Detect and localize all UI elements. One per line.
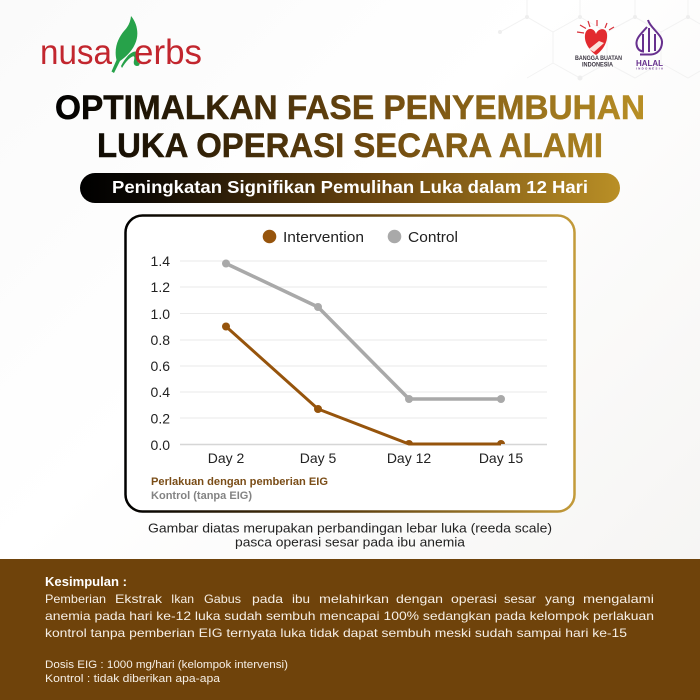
dosage notes: [45, 659, 288, 685]
icon: gunungan: [636, 20, 662, 54]
caption: Gambar diatas merupakan perbandingan lebar luka (reeda scale): [148, 520, 552, 536]
title: OPTIMALKAN FASE PENYEMBUHAN: [55, 89, 645, 127]
subtitle pill: [80, 173, 620, 203]
chart legend: Control: [408, 230, 458, 246]
y axis labels: 1.4: [151, 253, 170, 269]
panel: conclusion: [0, 559, 700, 700]
conclusion body: sesar: [504, 592, 536, 606]
caption: [148, 520, 552, 550]
logo: nusaherbs: [40, 16, 202, 73]
y axis labels: 1.0: [151, 306, 170, 322]
logo: Bangga Buatan Indonesia: BANGGA BUATAN: [575, 55, 622, 62]
chart legend: [263, 230, 458, 246]
x axis labels: [208, 450, 523, 466]
y axis labels: [151, 253, 170, 453]
y axis labels: 0.0: [151, 437, 170, 453]
icon: red heart: [585, 29, 607, 55]
y axis labels: 0.6: [151, 358, 170, 374]
conclusion body: dengan: [396, 592, 443, 606]
y axis labels: 0.4: [151, 384, 170, 400]
conclusion body: anemia pada hari ke-12 luka sudah sembuh mencapai 100% sedangkan pada kelompok perlakuan: [45, 609, 654, 623]
subtitle pill: Peningkatan Signifikan Pemulihan Luka dalam 12 Hari: [112, 177, 588, 197]
y axis labels: 1.2: [151, 279, 170, 295]
series: control: [222, 260, 505, 403]
y axis labels: 0.2: [151, 410, 170, 426]
caption: pasca operasi sesar pada ibu anemia: [235, 534, 466, 550]
conclusion body: ibu: [292, 592, 310, 606]
conclusion body: kontrol tanpa pemberian EIG ternyata luka tidak dapat sembuh meski sudah sampai hari ke-15: [45, 626, 627, 640]
panel: chart card: [126, 216, 574, 512]
conclusion body: [45, 592, 654, 640]
logo: Halal Indonesia: INDONESIA: [636, 66, 663, 70]
x axis labels: Day 5: [300, 450, 336, 466]
conclusion body: Gabus: [204, 592, 241, 606]
conclusion body: operasi: [451, 592, 497, 606]
chart legend: Intervention: [283, 230, 364, 246]
conclusion heading: Kesimpulan :: [45, 575, 127, 589]
logo: Halal Indonesia: HALAL: [636, 59, 663, 68]
icon: rays: [577, 20, 614, 33]
logo: Bangga Buatan Indonesia: [575, 20, 622, 68]
conclusion body: Ikan: [171, 592, 194, 606]
y axis labels: 0.8: [151, 332, 170, 348]
conclusion body: melahirkan: [319, 592, 389, 606]
title: LUKA OPERASI SECARA ALAMI: [97, 127, 603, 165]
chart note: [151, 476, 328, 502]
chart note: Kontrol (tanpa EIG): [151, 490, 252, 502]
logo: Bangga Buatan Indonesia: INDONESIA: [582, 62, 613, 68]
chart note: Perlakuan dengan pemberian EIG: [151, 476, 328, 488]
conclusion body: yang: [545, 592, 575, 606]
logo: nusaherbs: erbs: [134, 33, 202, 72]
line chart: [151, 253, 547, 466]
conclusion body: Pemberian: [45, 592, 106, 606]
x axis labels: Day 12: [387, 450, 431, 466]
conclusion body: mengalami: [583, 592, 654, 606]
title: [55, 89, 645, 165]
conclusion body: Ekstrak: [115, 592, 163, 606]
conclusion body: pada: [252, 592, 283, 606]
logo: Halal Indonesia: [636, 20, 663, 70]
x axis labels: Day 2: [208, 450, 244, 466]
dosage notes: Dosis EIG : 1000 mg/hari (kelompok intervensi): [45, 659, 288, 671]
x axis labels: Day 15: [479, 450, 523, 466]
series: intervention: [222, 322, 505, 444]
dosage notes: Kontrol : tidak diberikan apa-apa: [45, 673, 221, 685]
icon: green leaf forming letter h: [112, 16, 140, 73]
logo: nusaherbs: nusa: [40, 33, 112, 72]
